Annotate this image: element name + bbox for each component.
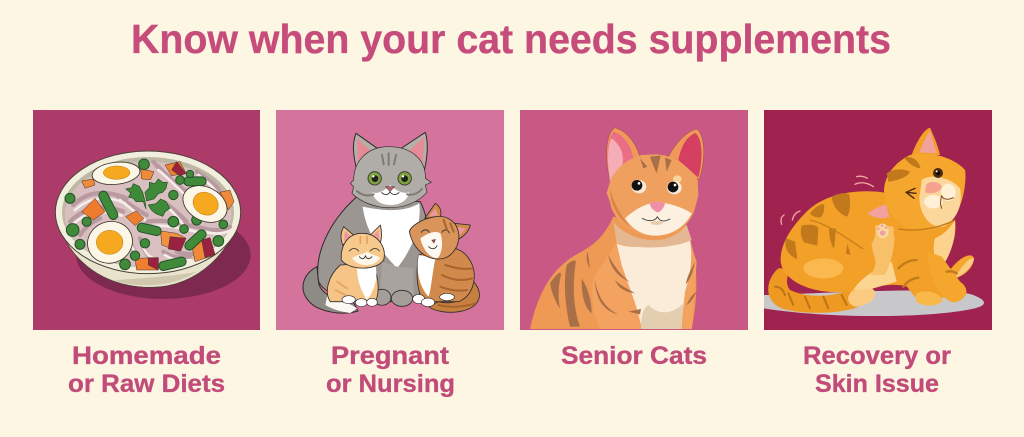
label: senior cats: Senior Cats: [561, 342, 707, 370]
panel: recovery or skin issue: [764, 110, 992, 330]
mother head: [350, 147, 431, 208]
orange kitten right tail: [429, 278, 479, 312]
scratching leg: [870, 225, 894, 275]
head: [884, 154, 965, 230]
body: [530, 217, 696, 329]
label: recovery or skin issue: [803, 342, 951, 398]
orange kitten right body: [417, 247, 474, 302]
green beans: [103, 181, 202, 266]
floor shadow: [764, 291, 984, 316]
panel: pregnant or nursing: [276, 110, 504, 330]
label: homemade or raw diets: Homemade: [72, 342, 221, 370]
mother tail: [303, 267, 358, 313]
label: pregnant or nursing: [326, 342, 455, 398]
label: homemade or raw diets: [68, 342, 225, 398]
panel: senior cats: [520, 110, 748, 330]
body: [781, 191, 933, 292]
haunch line: [810, 220, 863, 249]
mother ears: [353, 133, 382, 171]
eggs: [82, 160, 233, 270]
label: recovery or skin issue: Recovery or: [803, 342, 951, 370]
title: Know when your cat needs supplements: [131, 16, 891, 62]
icon: salad bowl: [55, 151, 251, 299]
label: pregnant or nursing: Pregnant: [331, 342, 450, 370]
panel: homemade or raw diets: [33, 110, 260, 330]
icon: mother cat with kittens: [303, 132, 479, 313]
label: homemade or raw diets: or Raw Diets: [68, 370, 225, 398]
vegetables: orange cubes: [82, 162, 234, 270]
motion marks: [781, 176, 873, 224]
icon: orange senior cat: [530, 128, 704, 329]
head: [607, 154, 698, 236]
icon: scratching cat: [764, 128, 984, 316]
chicken strands: [70, 162, 230, 262]
tail: [768, 268, 870, 313]
parsley: [126, 179, 170, 216]
orange kitten left: [327, 263, 378, 302]
chest and front legs: [893, 220, 955, 301]
label: pregnant or nursing: or Nursing: [326, 370, 455, 398]
label: recovery or skin issue: Skin Issue: [815, 370, 939, 398]
mother body: [318, 197, 431, 302]
ears: [607, 128, 641, 180]
ears: [912, 128, 940, 155]
